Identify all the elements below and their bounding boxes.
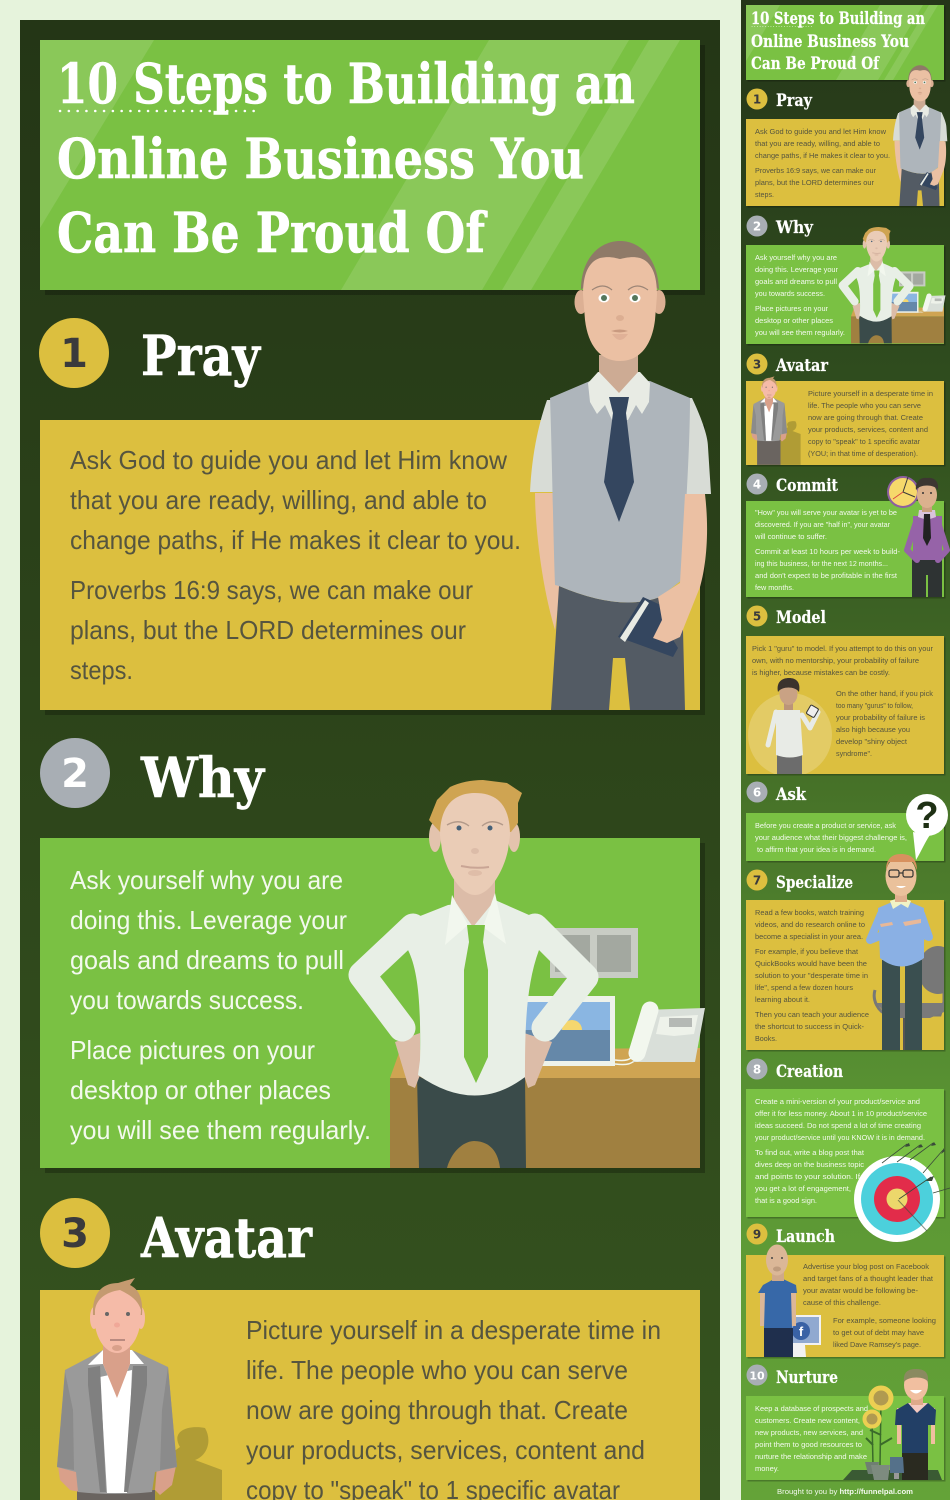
overview step 1 text	[755, 127, 890, 199]
overview step 4 text	[754, 508, 900, 592]
overview step 7 text: Books.	[755, 1034, 777, 1043]
overview step 6: Ask: 6	[753, 786, 761, 800]
overview step 8: Creation: Creation	[776, 1062, 843, 1081]
overview step 6 text	[755, 821, 907, 854]
overview step 2 text: Ask yourself why you are	[755, 253, 837, 262]
overview step 5: Model: Model	[776, 608, 826, 627]
overview step 7 text: Read a few books, watch training	[755, 908, 864, 917]
overview step 10 text: Keep a database of prospects and	[755, 1404, 868, 1413]
overview step 3: Avatar: Avatar	[775, 356, 828, 375]
overview step 4 text: few months.	[755, 583, 794, 592]
icon: speech bubble with question mark	[906, 794, 948, 860]
overview step 4 text: and don't expect to be profitable in the first	[755, 571, 898, 580]
step 2 text: desktop or other places	[70, 1075, 331, 1105]
step 3 text	[246, 1315, 661, 1500]
figure: man holding phone	[748, 678, 832, 777]
overview step 8 text: To find out, write a blog post that	[755, 1148, 865, 1157]
overview step 9 text	[803, 1262, 936, 1349]
overview step 1: Pray	[746, 88, 946, 208]
overview step 7 text: learning about it.	[755, 995, 810, 1004]
step 1 text	[70, 445, 521, 685]
overview step 4: Commit	[746, 474, 946, 598]
overview step 7 text: For example, if you believe that	[755, 947, 859, 956]
overview step 9: Launch	[746, 1224, 946, 1358]
figure: bald man with Facebook monitor: f	[799, 1324, 804, 1339]
overview step 4: Commit: Commit	[776, 476, 838, 495]
overview step 7 text: videos, and do research online to	[755, 920, 865, 929]
step 1 heading: 1	[60, 331, 88, 377]
overview step 2 text: Place pictures on your	[755, 304, 828, 313]
overview step 7 text: Then you can teach your audience	[755, 1010, 869, 1019]
overview step 5 text: develop "shiny object	[836, 737, 908, 746]
overview step 9: Launch: 9	[753, 1228, 761, 1242]
title text: 10 Steps to Building an	[57, 51, 635, 116]
overview step 4: Commit: 4	[753, 478, 761, 492]
overview step 3 text: Picture yourself in a desperate time in	[808, 389, 933, 398]
overview step 8 text: that is a good sign.	[755, 1196, 817, 1205]
step 3 text: now are going through that. Create	[246, 1395, 628, 1425]
step 2 text: goals and dreams to pull	[70, 945, 344, 975]
overview step 10: Nurture: 10	[749, 1370, 765, 1382]
overview step 9 text: to get out of debt may have	[833, 1328, 924, 1337]
figure: man watering sunflowers	[843, 1369, 942, 1480]
overview step 5 text: Pick 1 "guru" to model. If you attempt to do this on your	[752, 644, 933, 653]
overview step 2 text: desktop or other places	[755, 316, 833, 325]
overview step 8 text: ideas succeed. Do not spend a lot of time creating	[755, 1121, 921, 1130]
overview step 7 text: life", spend a few dozen hours	[755, 983, 853, 992]
step 2 heading: 2	[61, 751, 89, 797]
overview step 4 text: discovered. If you are "half in", your avatar	[755, 520, 890, 529]
overview step 5 text: syndrome".	[836, 749, 872, 758]
figure: bald man with Facebook monitor	[758, 1244, 821, 1357]
overview step 9 text: Advertise your blog post on Facebook	[803, 1262, 929, 1271]
overview step 5: Model: 5	[753, 610, 761, 624]
overview step 4 text: Commit at least 10 hours per week to build-	[755, 547, 900, 556]
step 2 panel	[40, 838, 705, 1173]
overview step 5 text	[752, 644, 933, 758]
overview step 6 text: Before you create a product or service, ask	[755, 821, 896, 830]
overview step 3 text: your products, services, content and	[808, 425, 928, 434]
overview step 2 text	[755, 253, 845, 337]
overview step 10: Nurture	[746, 1364, 946, 1482]
overview step 1: Pray: 1	[753, 92, 761, 106]
overview step 2: Why: 2	[753, 220, 761, 234]
overview step 5 text: own, with no mentorship, your probability of failure	[752, 656, 919, 665]
step 1 text: change paths, if He makes it clear to you.	[70, 525, 521, 555]
overview step 4 text: "How" you will serve your avatar is yet to be	[755, 508, 897, 517]
figure: man with glasses torso	[870, 854, 929, 966]
overview step 4 text: ing this business, for the next 12 months...	[755, 559, 888, 568]
overview step 6: Ask	[746, 782, 946, 862]
overview step 8 text: and points to your solution. If	[755, 1172, 861, 1181]
overview step 5 text: too many "gurus" to follow,	[836, 701, 913, 710]
figure: man in grey jacket	[57, 1278, 222, 1500]
overview step 4 text: will continue to suffer.	[754, 532, 827, 541]
overview step 5 text: your probability of failure is	[836, 713, 925, 722]
step 2 text: you will see them regularly.	[70, 1115, 371, 1145]
overview step 2 text: goals and dreams to pull	[755, 277, 837, 286]
overview step 3 text: now are going through that. Create	[808, 413, 923, 422]
overview step 9 text: cause of this challenge.	[803, 1298, 881, 1307]
step 1 text: that you are ready, willing, and able to	[70, 485, 487, 515]
step 3 text: life. The people who you can serve	[246, 1355, 628, 1385]
overview step 1 text: plans, but the LORD determines our	[755, 178, 874, 187]
overview step 7: Specialize	[746, 870, 946, 1052]
step 1 heading	[39, 318, 262, 388]
overview step 5 text: is higher, because mistakes can be costly.	[752, 668, 890, 677]
overview step 7 text: QuickBooks would have been the	[755, 959, 867, 968]
overview step 3: Avatar: 3	[753, 358, 761, 372]
step 1 text: steps.	[70, 655, 133, 685]
title text: Can Be Proud Of	[57, 200, 488, 265]
overview step 3 text: life. The people who you can serve	[808, 401, 921, 410]
overview step 5 text: On the other hand, if you pick	[836, 689, 933, 698]
overview step 3 text	[808, 389, 933, 458]
icon: target with arrows	[854, 1142, 950, 1242]
step 1 text: Ask God to guide you and let Him know	[70, 445, 507, 475]
panel: left enlarged view background	[20, 20, 720, 1500]
overview step 1 text: that you are ready, willing, and able to	[755, 139, 880, 148]
figure: office chair and trousers	[874, 946, 950, 1050]
step 3 heading: 3	[61, 1211, 89, 1257]
overview step 5 text: also high because you	[836, 725, 910, 734]
overview step 9 text: liked Dave Ramsey's page.	[833, 1340, 921, 1349]
overview figure: man in grey jacket	[751, 376, 801, 465]
overview step 3: Avatar	[746, 354, 946, 466]
overview step 2 text: you towards success.	[755, 289, 825, 298]
overview step 8 text: offer it for less money. About 1 in 10 product/service	[755, 1109, 927, 1118]
step 2 text: doing this. Leverage your	[70, 905, 347, 935]
step 2 text: Place pictures on your	[70, 1035, 315, 1065]
overview step 8 text	[755, 1097, 927, 1205]
overview step 8: Creation: 8	[753, 1062, 761, 1076]
overview title text: Can Be Proud Of	[751, 54, 880, 73]
step 3 panel	[40, 1290, 700, 1500]
figure: clock and man in purple shirt	[887, 476, 947, 597]
overview step 8 text: dives deep on the business topic	[755, 1160, 864, 1169]
overview title text: Online Business You	[751, 32, 909, 51]
overview step 10 text: new products, new services, and	[755, 1428, 863, 1437]
overview figure: man with book	[893, 65, 947, 206]
figure: man with book	[530, 241, 711, 710]
overview step 2: Why: Why	[775, 218, 813, 237]
step 1 heading: Pray	[141, 323, 262, 388]
overview step 7: Specialize: Specialize	[776, 873, 853, 892]
overview step 1 text: Ask God to guide you and let Him know	[755, 127, 886, 136]
overview title text	[751, 9, 925, 73]
overview step 5: Model	[746, 606, 946, 777]
title text: Online Business You	[57, 126, 584, 191]
overview step 7 text: become a specialist in your area.	[755, 932, 863, 941]
step 2 heading	[40, 738, 266, 810]
overview step 8: Creation	[746, 1058, 946, 1218]
overview step 10 text: money.	[755, 1464, 779, 1473]
overview step 9 text: For example, someone looking	[833, 1316, 936, 1325]
overview step 7: Specialize: 7	[753, 874, 761, 888]
overview step 6: Ask: Ask	[775, 785, 807, 804]
overview step 8 text: your product/service until you KNOW it is in demand.	[755, 1133, 925, 1142]
step 3 heading	[40, 1198, 313, 1270]
overview step 3 text: (YOU; in that time of desperation).	[808, 449, 918, 458]
overview step 2 text: doing this. Leverage your	[755, 265, 838, 274]
step 3 text: your products, services, content and	[246, 1435, 645, 1465]
overview step 9: Launch: Launch	[776, 1227, 835, 1246]
step 1 text: plans, but the LORD determines our	[70, 615, 466, 645]
overview step 7 text	[755, 908, 869, 1043]
title text	[57, 51, 635, 265]
overview step 10 text: customers. Create new content,	[755, 1416, 860, 1425]
step 2 text: Ask yourself why you are	[70, 865, 343, 895]
overview step 7 text: solution to your "desperate time in	[755, 971, 868, 980]
overview step 6 text: your audience what their biggest challenge is,	[755, 833, 907, 842]
overview step 8 text: Create a mini-version of your product/service and	[755, 1097, 920, 1106]
overview step 10: Nurture: Nurture	[776, 1368, 838, 1387]
overview step 9 text: and target fans of a thought leader that	[803, 1274, 934, 1283]
overview step 9 text: your avatar would be following be-	[803, 1286, 918, 1295]
overview step 7 text: the shortcut to success in Quick-	[755, 1022, 864, 1031]
overview step 10 text	[755, 1404, 868, 1473]
overview figure: man at desk	[843, 227, 946, 343]
step 3 heading: Avatar	[140, 1205, 313, 1270]
overview step 1: Pray: Pray	[776, 91, 812, 110]
overview step 10 text: nurture the relationship and make	[755, 1452, 867, 1461]
overview step 2: Why	[746, 216, 946, 346]
overview step 2 text: you will see them regularly.	[755, 328, 845, 337]
step 1 text: Proverbs 16:9 says, we can make our	[70, 575, 473, 605]
figure: man at desk	[362, 780, 705, 1168]
overview step 1 text: steps.	[755, 190, 774, 199]
icon: speech bubble with question mark: ?	[915, 795, 939, 837]
overview step 8 text: you get a lot of engagement,	[755, 1184, 851, 1193]
step 2 text: you towards success.	[70, 985, 304, 1015]
overview step 3 text: copy to "speak" to 1 specific avatar	[808, 437, 920, 446]
overview step 6 text: to affirm that your idea is in demand.	[757, 845, 876, 854]
overview step 10 text: point them to good resources to	[755, 1440, 862, 1449]
overview step 1 text: Proverbs 16:9 says, we can make our	[755, 166, 876, 175]
step 1 panel	[40, 420, 705, 715]
step 2 text	[70, 865, 371, 1145]
overview step 1 text: change paths, if He makes it clear to you.	[755, 151, 890, 160]
overview title	[746, 5, 946, 82]
step 3 text: Picture yourself in a desperate time in	[246, 1315, 661, 1345]
step 2 heading: Why	[140, 745, 266, 810]
panel: right full overview background	[741, 0, 950, 1500]
footer credit: Brought to you by http://funnelpal.com	[777, 1487, 913, 1496]
title banner	[40, 40, 705, 295]
